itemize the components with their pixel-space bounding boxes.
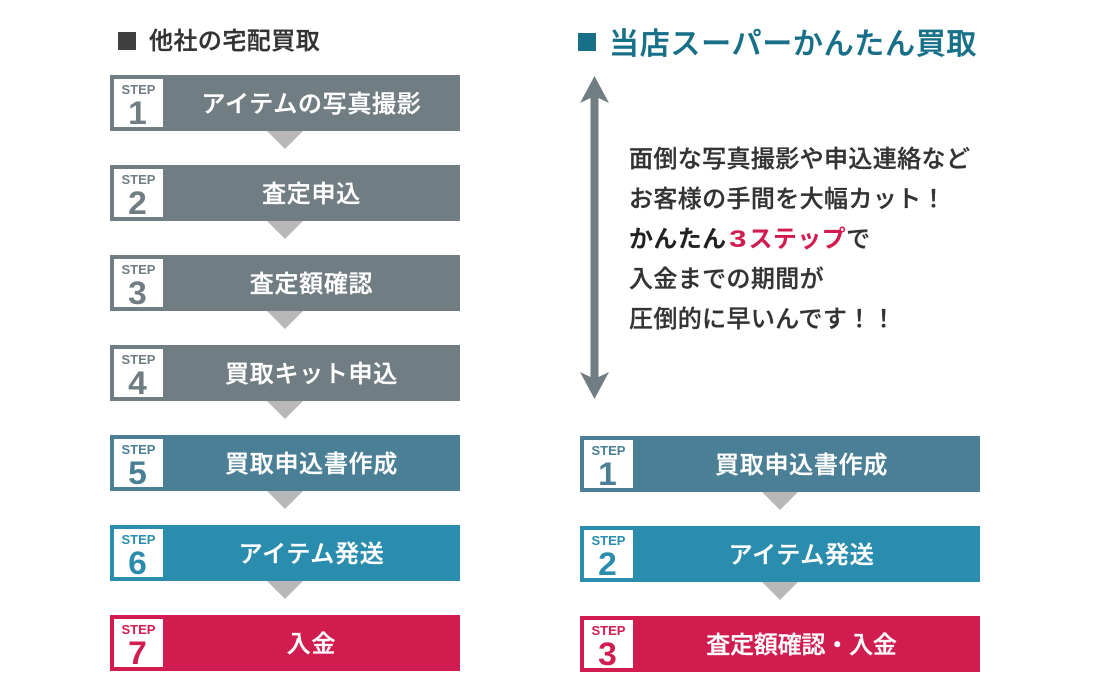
step 5: STEP [122,442,155,457]
step 7 [110,615,460,671]
step 2: 2 [128,185,147,221]
step 7: 入金 [287,631,336,658]
heading: our store: 当店スーパーかんたん買取 [609,28,977,61]
arrow [267,401,303,419]
arrow [762,492,798,510]
step 6: STEP [122,532,155,547]
step 2 [110,165,460,221]
arrow [267,491,303,509]
step 3: STEP [592,623,625,638]
arrow [267,581,303,599]
step 2: 2 [598,546,617,582]
text block: explanation: お客様の手間を大幅カット！ [629,186,946,213]
arrow [267,311,303,329]
step 2: STEP [592,533,625,548]
flow: our store steps [580,436,980,672]
flow: other companies steps [110,75,460,671]
step 7: STEP [122,622,155,637]
step 4: 買取キット申込 [225,361,398,388]
step 3: STEP [122,262,155,277]
step 4: 4 [128,365,147,401]
text block: explanation: 入金までの期間が [629,266,824,293]
step 1: 1 [128,95,147,131]
arrow: double-headed vertical [580,76,609,399]
step 5: 買取申込書作成 [225,451,398,478]
step 3: 査定額確認・入金 [706,632,897,659]
step 3 [580,616,980,672]
step 4: STEP [122,352,155,367]
step 5: 5 [128,455,147,491]
text block: explanation [629,146,970,333]
step 3: 3 [128,275,147,311]
step 1: 1 [598,456,617,492]
step 2 [580,526,980,582]
step 1 [580,436,980,492]
heading: other companies: 他社の宅配買取 [149,28,320,55]
text block: explanation: 面倒な写真撮影や申込連絡など [629,146,970,173]
step 2: STEP [122,172,155,187]
text block: explanation: かんたん ステップで [629,226,870,253]
text block: explanation: 3 [729,226,746,253]
step 3: 査定額確認 [250,271,373,298]
arrow [762,582,798,600]
step 1 [110,75,460,131]
text block: explanation: 圧倒的に早いんです！！ [629,306,896,333]
step 6: 6 [128,545,147,581]
step 6 [110,525,460,581]
step 2: 査定申込 [262,181,361,208]
step 3 [110,255,460,311]
step 4 [110,345,460,401]
arrow [267,221,303,239]
step 1: STEP [592,443,625,458]
step 1: 買取申込書作成 [715,452,888,479]
arrow [267,131,303,149]
step 5 [110,435,460,491]
step 1: アイテムの写真撮影 [202,91,421,118]
step 2: アイテム発送 [729,542,874,569]
step 3: 3 [598,636,617,672]
step 6: アイテム発送 [239,541,384,568]
step 1: STEP [122,82,155,97]
step 7: 7 [128,635,147,671]
